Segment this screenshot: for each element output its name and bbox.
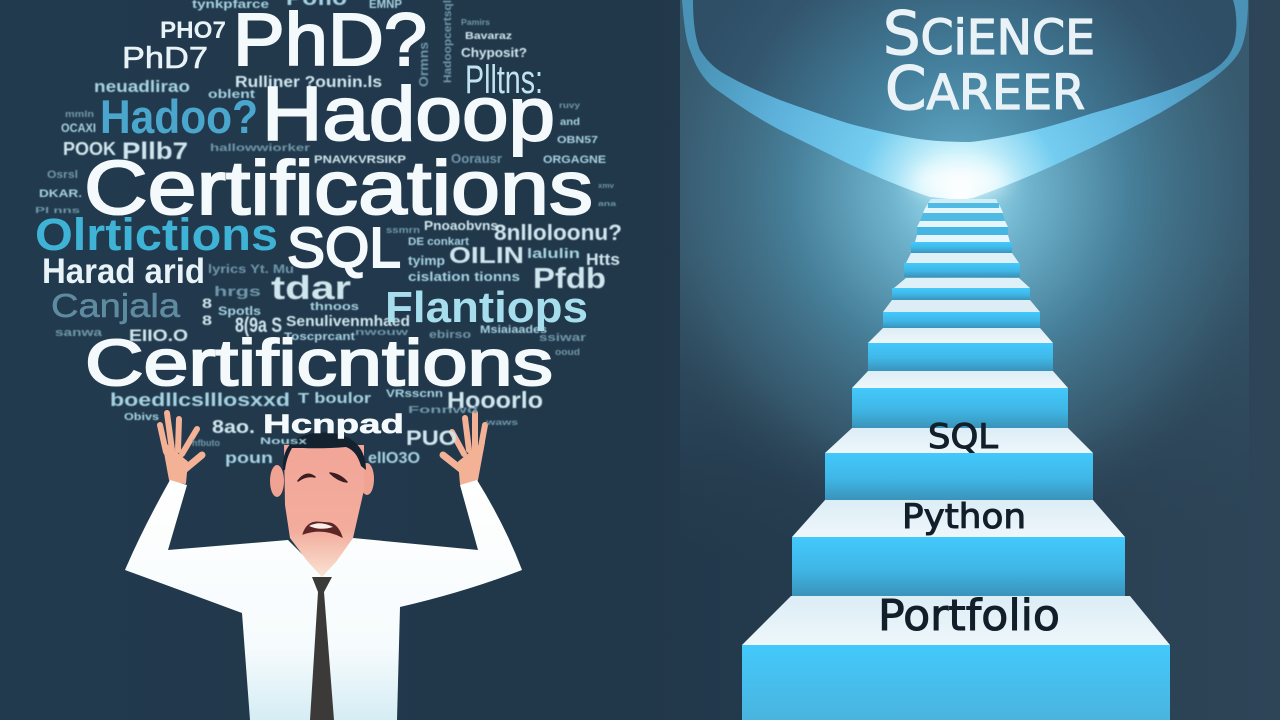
small scattered words: sanwa xyxy=(55,327,103,339)
illustration: stressed man xyxy=(125,413,522,720)
small scattered words: hrgs xyxy=(214,283,261,299)
small scattered words: lalulin xyxy=(527,245,580,261)
small scattered words: Hooorlo xyxy=(447,387,543,413)
small scattered words: Chyposit? xyxy=(461,45,527,60)
small scattered words: Oorausr xyxy=(451,151,502,166)
word: Canjala: Canjala xyxy=(51,287,181,324)
word: PhD small 2: PhD7 xyxy=(122,40,208,75)
small scattered words: DKAR. xyxy=(39,188,82,200)
small scattered words: ssiwar xyxy=(539,332,587,344)
small scattered words: Bavaraz xyxy=(465,31,512,42)
small scattered words: Pfdb xyxy=(533,263,606,295)
word: PhD?: PhD? xyxy=(233,0,427,81)
small scattered words: ebirso xyxy=(429,329,471,341)
small scattered words: Pnoaobvns xyxy=(424,218,498,233)
hair xyxy=(283,433,366,470)
small scattered words: elIO3O xyxy=(368,450,420,467)
small scattered words: cislation tionns xyxy=(408,269,520,284)
small scattered words: Pllb7 xyxy=(122,138,188,165)
word: Flanttiops: Flantiops xyxy=(385,283,588,332)
necktie xyxy=(310,577,334,720)
small scattered words: 8nlloloonu? xyxy=(494,220,622,245)
small scattered words: PNAVKVRSIKP xyxy=(314,154,406,166)
small scattered words: ooud xyxy=(555,347,580,357)
panel base tone xyxy=(680,0,1249,560)
small scattered words: OCAXI xyxy=(61,121,96,135)
small scattered words: Obivs xyxy=(124,412,160,423)
word: Harad arid: Harad arid xyxy=(42,252,205,291)
small scattered words: 8(9a S xyxy=(235,314,282,337)
step label: Python: Python xyxy=(902,497,1026,537)
left hand xyxy=(160,413,202,483)
small scattered words: 8 xyxy=(202,295,212,311)
mouth xyxy=(303,522,342,537)
small scattered words: DE conkart xyxy=(408,236,469,248)
ears and head xyxy=(270,433,374,577)
small scattered words: Pl nns xyxy=(35,206,81,215)
small scattered words: Osrsl xyxy=(47,169,78,181)
shirt xyxy=(125,480,522,720)
right hand xyxy=(443,413,485,484)
small scattered words: ssmrn xyxy=(386,225,420,235)
step label: SQL: SQL xyxy=(928,417,998,457)
small scattered words: POOK xyxy=(63,139,116,159)
word: Certifications: Certifications xyxy=(84,146,593,231)
small scattered words: poun xyxy=(225,450,273,467)
word cloud xyxy=(35,0,622,467)
small scattered words: Ormns xyxy=(416,42,431,87)
small scattered words: OBN57 xyxy=(557,135,599,146)
small scattered words: Toscprcant xyxy=(284,331,355,343)
small scattered words: Nousx xyxy=(260,436,307,446)
small scattered words: Senulivenmhaed xyxy=(286,313,410,330)
title: Science Career: SCiENCE xyxy=(883,0,1095,69)
small scattered words: tdar xyxy=(271,269,351,306)
spotlight glow xyxy=(680,0,1249,560)
word: SQL: SQL xyxy=(287,216,401,280)
step label: Portfolio: Portfolio xyxy=(878,591,1060,641)
small scattered words: and xyxy=(560,117,580,128)
small scattered words xyxy=(35,0,622,467)
small scattered words: Msiaiaades xyxy=(480,324,547,336)
title: Science Career xyxy=(883,0,1095,124)
small scattered words: OILIN xyxy=(449,242,524,268)
title: Science Career: CAREER xyxy=(885,54,1085,124)
small scattered words: T boulor xyxy=(298,390,371,407)
small scattered words: Htts xyxy=(586,250,620,269)
panel: data science career staircase xyxy=(680,0,1249,720)
small scattered words: Spotls xyxy=(218,304,261,318)
word: Plltns: Plltns: xyxy=(465,58,543,102)
word: Hcnpad: Hcnpad xyxy=(263,409,404,439)
small scattered words: oblent xyxy=(208,87,255,101)
small scattered words: ORGAGNE xyxy=(543,154,606,166)
small scattered words: tyimp xyxy=(408,253,445,268)
small scattered words: mmln xyxy=(65,109,94,119)
word: Oltictions blue: Olrtictions xyxy=(35,209,278,260)
small scattered words: PUO xyxy=(406,427,457,450)
small scattered words: hfbuto xyxy=(192,438,221,448)
word: Certificntions: Certificntions xyxy=(85,326,553,399)
closed eyes xyxy=(298,473,347,482)
word: PhD small 1: PHO7 xyxy=(160,17,226,44)
staircase xyxy=(742,199,1170,720)
word: Hadoop blue: Hadoo? xyxy=(100,90,258,143)
small scattered words: Fonnwd xyxy=(408,405,478,416)
small scattered words: EIIO.O xyxy=(129,326,188,345)
small scattered words: 8 xyxy=(202,312,212,328)
small scattered words: thnoos xyxy=(310,301,359,313)
small scattered words: Rulliner ?ounin.ls xyxy=(235,74,382,91)
small scattered words: ana xyxy=(598,201,616,208)
small scattered words: lyrics Yt. Mu xyxy=(208,262,294,276)
small scattered words: boedllcslllosxxd xyxy=(110,390,290,410)
word: Hadoop: Hadoop xyxy=(262,72,555,157)
small scattered words: hallowwiorker xyxy=(210,143,310,154)
small scattered words: xmv xyxy=(598,183,614,190)
small scattered words: 8ao. xyxy=(212,417,255,437)
small scattered words: Pamirs xyxy=(461,18,491,27)
small scattered words: nwouw xyxy=(355,327,410,337)
small scattered words: VRsscnn xyxy=(386,388,443,400)
small scattered words: waws xyxy=(485,418,519,427)
small scattered words: Hadoopcertsql xyxy=(442,0,454,83)
small scattered words: ruvy xyxy=(559,101,581,110)
small scattered words: neuadlirao xyxy=(94,77,190,96)
funnel of light xyxy=(682,0,1248,200)
